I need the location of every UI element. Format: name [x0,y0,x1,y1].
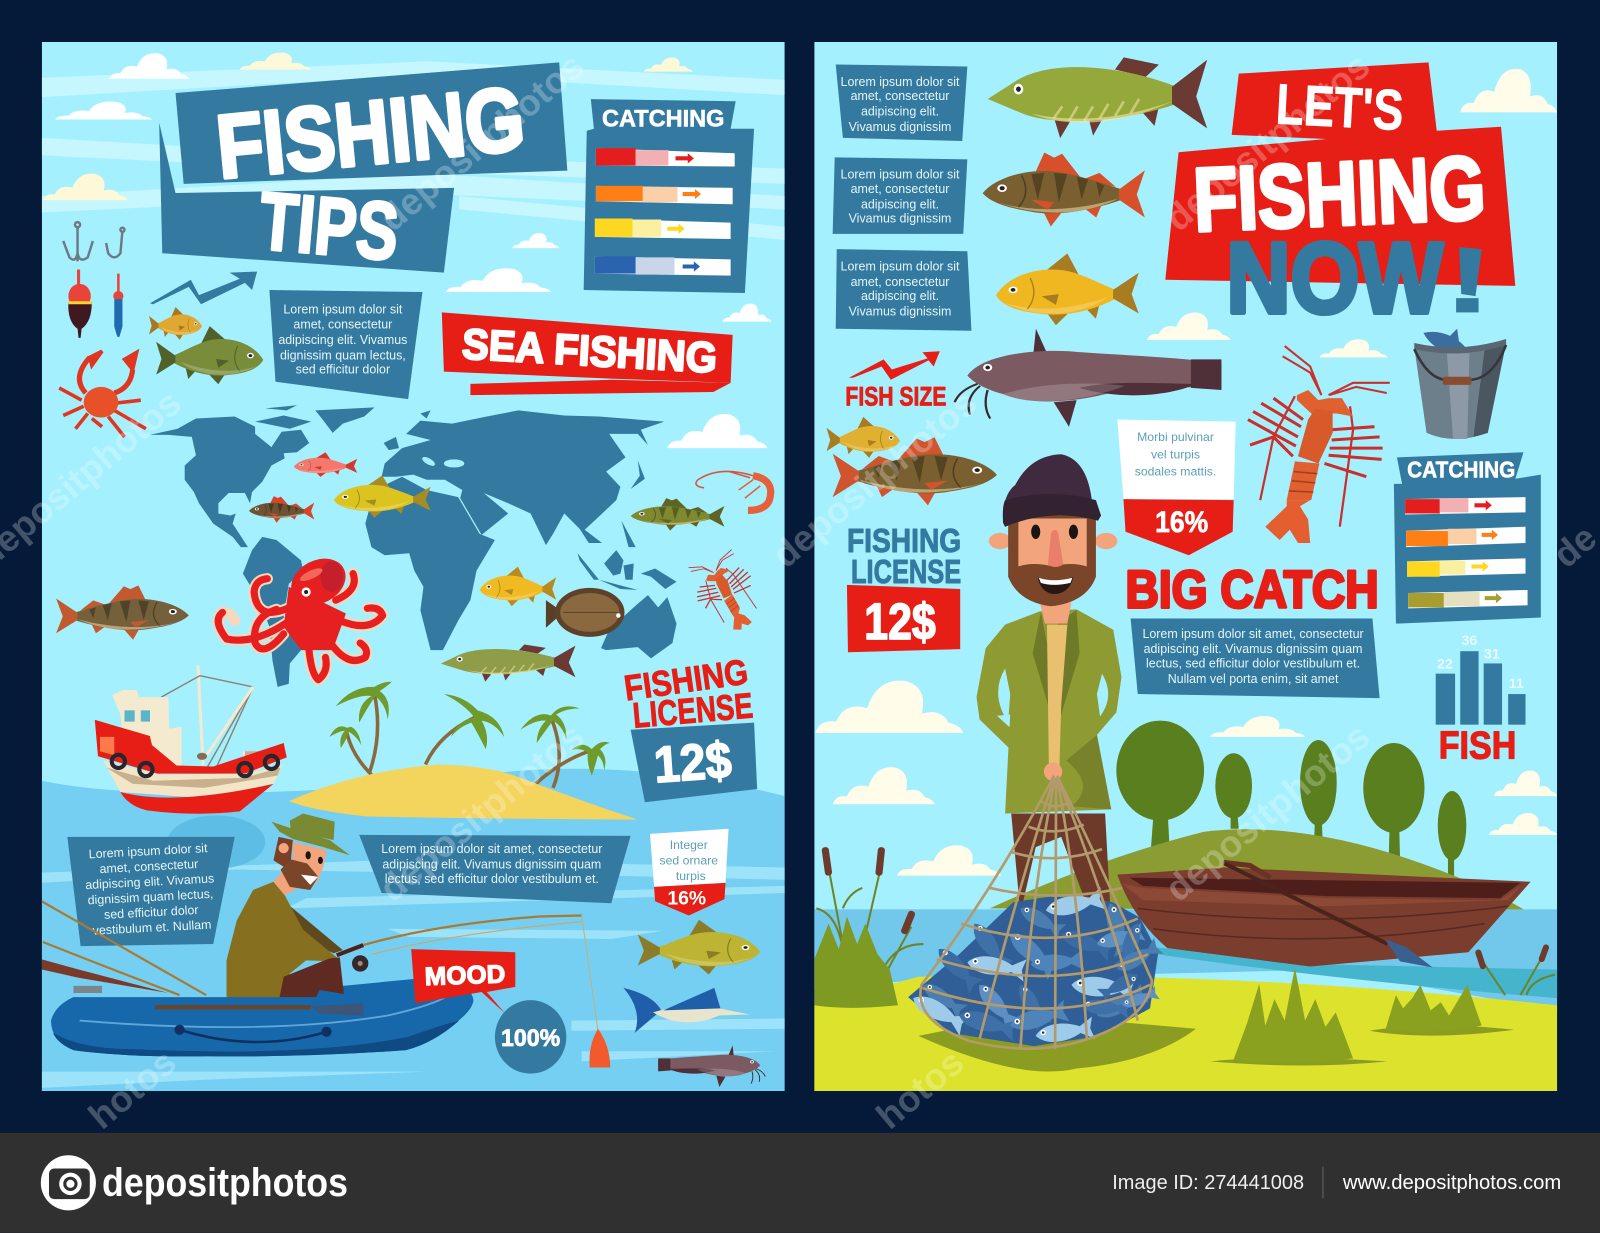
trousers [1011,813,1110,919]
icon: lobster [1248,346,1390,543]
fish: perch [833,437,997,505]
badge: morbi 16%: 16% [1155,506,1208,539]
badge: fishing license [622,652,757,802]
fish: pike [988,57,1207,138]
badge: integer 16%: turpis [676,869,706,883]
fish: perch [983,152,1145,226]
icon: floats [68,270,123,338]
fish: gold carp [996,253,1139,325]
body [290,906,343,954]
watermark overlay: hotos [869,1041,971,1137]
text blocks: species notes: amet, consectetur [851,89,949,103]
landscape: trees and hill [990,721,1526,910]
fish: yellow carp [334,475,431,518]
panel: let's fishing poster [814,42,1557,1091]
bar chart: fish [1436,633,1526,767]
fish: large perch [56,585,189,640]
text block: intro [269,290,422,399]
watermark overlay: depositphotos [372,715,592,909]
badge: 100%: 100% [501,1025,560,1052]
watermark overlay: hotos [81,1041,184,1137]
ocean [42,769,785,1091]
fish: green carp [638,920,760,974]
icon: crab [59,351,146,437]
world map [150,405,677,687]
sky [42,42,785,1091]
text block: intro: Lorem ipsum dolor sit [283,302,403,316]
text blocks: species notes: amet, consectetur [851,182,949,196]
text block: big catch: lectus, sed efficitur dolor vestibulum et. [1146,657,1360,671]
text block: big catch: Lorem ipsum dolor sit amet, consectetur [1142,627,1364,641]
bar chart: fish: 22 [1437,657,1453,673]
jacket [977,609,1121,813]
badge: fishing license: FISHING [622,652,751,709]
text block: big catch: adipiscing elit. Vivamus dignissim quam [1144,642,1363,656]
icon: reeds left [814,847,923,1008]
icon: island with palms [289,682,638,820]
text block: center note: adipiscing elit. Vivamus dignissim quam [382,858,601,872]
banner: tips [159,123,454,278]
text blocks: species notes [833,64,971,331]
badge: morbi 16% [1117,420,1236,555]
clouds [815,69,1557,876]
icon: shrimp [696,471,771,510]
person: fisherman in boat [40,813,598,1056]
watermark overlay: depositphotos [372,45,592,239]
fish: small gold [149,307,202,340]
fish: catfish [955,329,1221,427]
sky [814,42,1557,1091]
heading: fish size: FISH SIZE [845,381,946,411]
text blocks: species notes: Vivamus dignissim [849,120,951,134]
text blocks: species notes: Lorem ipsum dolor sit [841,260,960,274]
text block: fisherman note: adipiscing elit. Vivamus [85,871,214,892]
footer bar [0,1133,1600,1233]
head [273,868,302,895]
icon: bucket with fish [1414,329,1506,439]
panel: catching bars [584,99,754,293]
fish: perch on map [249,496,314,523]
icon: octopus [218,549,383,680]
text blocks: species notes: adipiscing elit. [861,289,939,303]
banner: let's fishing: FISHING [1192,138,1487,251]
text blocks: species notes: Lorem ipsum dolor sit [841,168,960,182]
icon: reeds right [1475,944,1555,995]
fish: flounder [546,588,624,637]
badge: 100% [495,1000,566,1074]
site url: www.depositphotos.com [1342,1172,1561,1194]
badge: fishing license: LICENSE [851,554,961,591]
watermark overlay: depositphotos [765,382,985,576]
fish: marlin [623,988,750,1033]
text block: intro: adipiscing elit. Vivamus [278,333,407,347]
badge: integer 16% [650,829,729,915]
grass tufts [1210,968,1514,1065]
banner: tips: TIPS [256,175,402,278]
badge: fishing license: 12$ [864,593,936,650]
banner: sea fishing: SEA FISHING [461,320,718,383]
arrow: fish size [849,351,940,380]
image id: Image ID: 274441008 [1112,1172,1304,1194]
fish: salmon [294,452,357,477]
text blocks: species notes: Vivamus dignissim [849,212,951,226]
panel: catching bars [1394,452,1541,624]
fish: pike on map [441,645,576,682]
banner: let's fishing: LET'S [1274,72,1405,143]
text block: fisherman note: amet, consectetur [99,857,199,876]
fish: small catfish [658,1045,765,1087]
badge: fishing license [847,523,961,652]
bar chart: fish: 11 [1509,676,1524,692]
text block: big catch [1131,619,1380,698]
icon: rowing boat [1117,862,1531,968]
watermark overlay: depositphotos [1157,45,1377,239]
water [814,909,1557,1010]
bar chart: fish: 31 [1484,646,1500,662]
watermark overlay: depositphotos [1157,715,1377,909]
fish: olive perch [631,498,724,531]
banner: fishing: FISHING [212,69,529,198]
text blocks: species notes: adipiscing elit. [861,197,939,211]
arrow: growth [150,272,257,304]
fish: olive carp [156,326,263,384]
badge: fishing license: 12$ [652,731,733,793]
ground [814,944,1557,1091]
text block: center note: Lorem ipsum dolor sit amet, consectetur [381,842,602,856]
text block: fisherman note [67,837,235,946]
callout: mood [411,949,515,1013]
text blocks: species notes: amet, consectetur [851,275,949,289]
text blocks: species notes: Vivamus dignissim [849,304,951,318]
clouds [43,52,771,448]
text blocks: species notes: Lorem ipsum dolor sit [841,75,960,89]
fish: gold [480,567,556,606]
text block: fisherman note: sed efficitur dolor [104,903,199,922]
bar chart: fish: FISH [1439,724,1516,767]
icon: hooked fish [589,1029,610,1068]
text block: intro: sed efficitur dolor [296,363,390,377]
badge: integer 16%: 16% [667,887,706,909]
text block: fisherman note: vestibulum et. Nullam [92,918,212,938]
panel: fishing tips poster [40,42,785,1091]
icon: hooks [63,222,124,261]
text block: intro: dignissim quam lectus, [280,348,406,362]
logo: camera [41,1155,96,1210]
badge: integer 16%: Integer [670,838,708,852]
heading: big catch: BIG CATCH [1126,560,1379,619]
icon: lobster small [688,549,757,630]
badge: morbi 16%: sodales mattis. [1135,465,1216,479]
shadow: net [918,1021,1196,1072]
text block: center note [359,835,631,903]
person: fisherman with net [977,454,1121,919]
badge: morbi 16%: vel turpis [1151,447,1200,461]
badge: fishing license: LICENSE [631,685,755,736]
inflatable boat [51,975,473,1056]
fish: small gold [827,417,900,458]
icon: fishing boat [95,665,287,814]
badge: fishing license: FISHING [847,523,961,560]
rods [40,900,598,1031]
text block: big catch: Nullam vel porta enim, sit amet [1168,672,1339,686]
text block: center note: lectus, sed efficitur dolor vestibulum et. [385,872,599,886]
bar chart: fish: 36 [1461,633,1477,649]
text block: fisherman note: Lorem ipsum dolor sit [88,841,208,861]
panel: catching bars: CATCHING [602,106,724,133]
banner: let's fishing [1165,62,1515,334]
text blocks: species notes: adipiscing elit. [861,104,939,118]
brand name: depositphotos [102,1161,348,1205]
badge: morbi 16%: Morbi pulvinar [1137,430,1214,444]
banner: let's fishing: NOW [1227,222,1443,334]
text block: fisherman note: dignissim quam lectus, [87,887,214,907]
head [1040,602,1071,624]
badge: integer 16%: sed ornare [660,853,718,867]
panel: catching bars: CATCHING [1407,457,1515,483]
callout: mood: MOOD [424,960,506,991]
net with fish catch [908,776,1163,1049]
text block: intro: amet, consectetur [293,318,392,332]
